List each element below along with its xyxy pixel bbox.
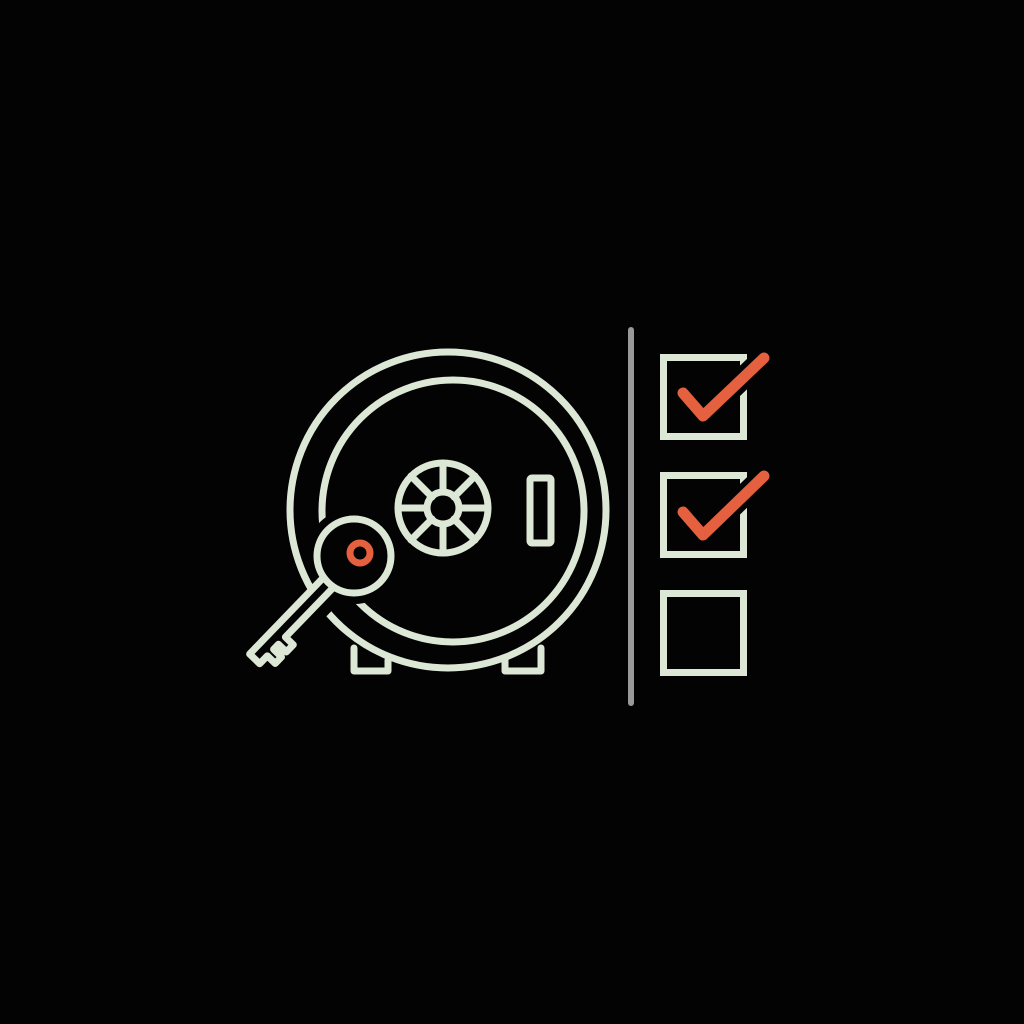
- checkbox 2 (checked): [664, 476, 764, 554]
- checklist: [664, 358, 764, 672]
- key gap mask: [306, 508, 402, 604]
- outer circle: [290, 352, 606, 668]
- checkbox 1 (checked): [664, 358, 764, 436]
- icon: key: [245, 508, 402, 671]
- icon: safe: [290, 352, 606, 671]
- checkbox 3 (empty): [664, 594, 744, 672]
- key ring accent: [350, 543, 370, 563]
- inner door circle: [322, 380, 584, 642]
- safe feet: [354, 648, 541, 671]
- divider: [628, 330, 634, 703]
- handle: [530, 478, 551, 543]
- dial: [398, 463, 488, 553]
